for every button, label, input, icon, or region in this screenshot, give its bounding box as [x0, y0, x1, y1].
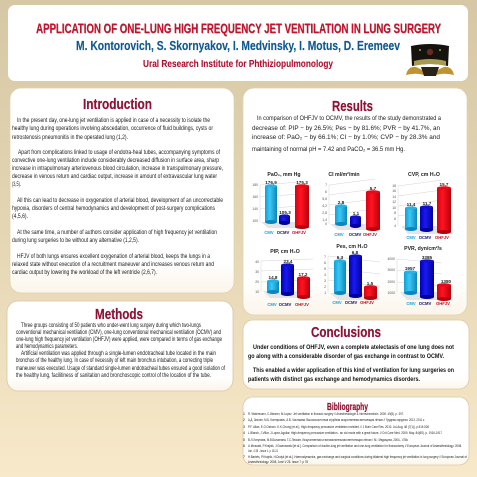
- chart: CVP: 10: [392, 206, 396, 210]
- bar: OHFJV 175,3: 175,3: [296, 180, 308, 185]
- chart: CI: 4,2: [322, 204, 327, 208]
- chart: PaO2: PaO₂, mm Hg: [267, 172, 301, 178]
- text block: methods: one-lung high frequency jet ventilation (OHFJV) were applied, were compared in terms of gas exchange: [16, 337, 222, 343]
- text block: results summary: maintaining of normal pH = 7.42 and PaCO₂ = 36.5 mm Hg.: [252, 146, 405, 153]
- reference list: R. Watermann, C.Wanner, M.Lopez. Jet ventilation in thoracic surgery // Anesthesiologie & Intensivmedizin. 2000. 49(5). p. 397.: [248, 412, 404, 416]
- chart: CI: 0: [325, 222, 327, 226]
- chart: Pes: 7: [324, 255, 326, 259]
- text block: introduction: At the same time, a number of authors consider application of high frequency jet ventilation: [17, 230, 217, 236]
- text block: introduction: In the present day, one-lung jet ventilation is applied in case of a necessity to isolate the: [17, 118, 211, 124]
- bar: CMV 2,8: 2,8: [338, 200, 345, 205]
- text block: introduction: [12, 118, 224, 276]
- text block: conclusions: patients with distinct gas exchange and hemodynamics disorders.: [248, 376, 420, 383]
- text block: conclusions: go along with a considerable disorder of gas exchange in contrast to OCMV.: [248, 353, 444, 360]
- chart: PIP: 40: [255, 260, 259, 264]
- reference list: 5: [243, 438, 245, 442]
- bar: OCMV 23,4: 23,4: [284, 259, 293, 264]
- text block: methods: maneuver was executed. Usage of standard single-lumen endotracheal tubes ensured a good isolation of: [16, 366, 225, 372]
- chart: CI: 7: [325, 183, 327, 187]
- chart: PIP: 20: [255, 280, 259, 284]
- chart: CVP: 8: [394, 211, 396, 215]
- legend: OCMV: [349, 232, 361, 237]
- chart: Pes: [324, 244, 380, 305]
- reference list: 7: [243, 455, 245, 459]
- chart: CVP: [392, 172, 453, 240]
- bar: OHFJV 15,7: 15,7: [440, 182, 449, 187]
- panel: methods: [7, 301, 233, 391]
- text block: introduction: increase in intrapulmonary arteriovenous blood circulation, increase in transpulmonary pressure,: [12, 166, 223, 172]
- legend: OHFJV: [360, 300, 374, 305]
- chart: PIP: 30: [255, 270, 259, 274]
- chart: CVP: 6: [394, 217, 396, 221]
- chart: PVR: [387, 246, 452, 306]
- reference list: 3: [243, 425, 245, 429]
- legend: [264, 230, 306, 235]
- reference list: 1: [243, 412, 245, 416]
- chart: PVR: PVR, dyn/cm²/s: [404, 246, 442, 252]
- heading: introduction: Introduction: [83, 96, 152, 113]
- chart: Pes: Pes, cm H₂O: [336, 244, 368, 250]
- legend: OHFJV: [295, 302, 309, 307]
- panel: conclusions: [243, 320, 469, 389]
- text block: introduction: cardiac output by lowering the workload of the left ventricle (2,6,7).: [12, 270, 157, 276]
- bar: CMV 11,4: 11,4: [407, 202, 416, 207]
- chart: Pes: 5: [324, 267, 326, 271]
- bar: OHFJV 17,2: 17,2: [299, 272, 308, 277]
- chart: PIP: 10: [255, 290, 259, 294]
- text block: introduction: convective one-lung ventilation include considerably decreased diffusion in surface area, sharp: [12, 158, 220, 164]
- text block: methods: conventional mechanical ventilation (CMV), one-lung conventional mechanical ventilation (OCMV) and: [16, 330, 221, 336]
- text block: introduction: (3,5).: [12, 182, 21, 188]
- text block: results summary: In comparison of OHFJV to OCMV, the results of the study demonstrated a: [257, 115, 441, 122]
- reference list: 2: [243, 418, 245, 422]
- authors: M. Kontorovich, S. Skornyakov, I. Medvinsky, I. Motus, D. Eremeev: [76, 39, 400, 53]
- text block: introduction: decrease in venous return and cardiac output, increase in amount of extravascular lung water: [12, 174, 217, 180]
- chart: PIP: PIP, cm H₂O: [270, 249, 300, 255]
- legend: [267, 302, 309, 307]
- icon: institute emblem: [406, 44, 454, 76]
- bar: CMV 1957: 1957: [405, 266, 416, 271]
- legend: OCMV: [277, 230, 289, 235]
- chart: CI: 6: [325, 190, 327, 194]
- text block: introduction: healthy lung during operations involving abscedation, occurrence of fluid buildings, cysts or: [12, 126, 213, 132]
- reference list: [243, 412, 467, 464]
- chart: CI: 5,6: [322, 197, 327, 201]
- chart: Pes: 3: [324, 279, 326, 283]
- bar: OHFJV 1380: 1380: [441, 279, 452, 284]
- reference list: 6: [243, 444, 245, 448]
- panel: bibliography: [243, 397, 469, 465]
- text block: results summary: [252, 115, 441, 153]
- heading: results: Results: [332, 99, 373, 115]
- bar: OHFJV 1,5: 1,5: [367, 281, 374, 286]
- legend: OHFJV: [436, 301, 450, 306]
- reference list: Jan. 4 35 - Issue 1. p 15-21: [248, 449, 278, 453]
- chart: PIP: [255, 249, 313, 307]
- legend: OCMV: [345, 300, 357, 305]
- text block: introduction: Apart from complications linked to usage of endotra-heal tubes, accompanying symptoms of: [18, 150, 220, 156]
- text block: methods: and hemodynamics parameters.: [16, 344, 78, 350]
- chart: PaO2: 180: [252, 183, 258, 187]
- bar: OCMV 6,8: 6,8: [352, 250, 359, 255]
- text block: methods: [16, 323, 225, 379]
- text block: introduction: relaxed state without execution of a recruitment maneuver and increases venous return and: [12, 262, 214, 268]
- chart: CVP: 12: [392, 200, 396, 204]
- text block: methods: Artificial ventilation was applied through a single-lumen endotracheal tube located in the main: [21, 351, 216, 357]
- legend: [406, 235, 449, 240]
- chart: PaO2: 100: [252, 219, 258, 223]
- reference list: P.F. Allan, E.G.Osborn, K.K.Chung [et al.]. High-frequency percussive ventilation revisited. // J Burn Care Res. 2010. Jul-Aug; 48 (7(1)). p.519-526: [248, 425, 429, 429]
- legend: OCMV: [419, 235, 431, 240]
- chart: Pes: 2: [324, 285, 326, 289]
- text block: introduction: retrostenosis pneumonitis in the operated lung (1,2).: [12, 135, 128, 141]
- chart: PVR: 1000: [387, 291, 395, 295]
- chart: CVP: 4: [394, 224, 396, 228]
- bar: OCMV 105,3: 105,3: [279, 210, 291, 215]
- bar: CMV 6,3: 6,3: [337, 255, 344, 260]
- bar: CMV 14,8: 14,8: [269, 275, 278, 280]
- chart: CI: 2,8: [322, 211, 327, 215]
- chart: CI: 1,4: [322, 218, 327, 222]
- bar: OCMV 3385: 3385: [422, 255, 433, 260]
- text block: results summary: increase of: PaO₂ − by 66.1%; CI − by 1.0%; CVP − by 28.3% and: [252, 134, 440, 141]
- chart: PVR: 2000: [387, 280, 395, 284]
- legend: OCMV: [279, 302, 291, 307]
- legend: CMV: [267, 302, 277, 307]
- bar: OHFJV 5,7: 5,7: [370, 186, 377, 191]
- legend: [406, 301, 450, 306]
- chart: CI: CI ml/m²/min: [328, 172, 360, 178]
- chart: PVR: 3000: [387, 268, 395, 272]
- legend: CMV: [334, 232, 344, 237]
- reference list: Anaesthesiology. 2008, June V 25. Issue 7. p 78: [248, 460, 308, 464]
- reference list: 4: [243, 431, 245, 435]
- chart: PVR: 4000: [387, 257, 395, 261]
- heading: bibliography: Bibliography: [327, 402, 368, 413]
- heading: methods: Methods: [95, 306, 143, 323]
- text block: methods: Three groups consisting of 50 patients who under-went lung surgery during which two-lungs: [21, 323, 201, 329]
- chart: CVP: CVP, cm H₂O: [408, 172, 440, 178]
- text block: methods: the healthy lung, facilitiness of sanitation and bronchoscopic control of the location of the tube.: [16, 373, 211, 379]
- chart: Pes: 6: [324, 261, 326, 265]
- legend: OHFJV: [292, 230, 306, 235]
- bar: CMV 176,9: 176,9: [265, 180, 277, 185]
- bar: OCMV 1,1: 1,1: [353, 211, 360, 216]
- panel: results: [243, 88, 467, 315]
- legend: CMV: [332, 300, 342, 305]
- chart: PaO2: 140: [252, 207, 258, 211]
- legend: CMV: [406, 235, 416, 240]
- legend: CMV: [406, 301, 416, 306]
- legend: CMV: [264, 230, 274, 235]
- institute: Ural Research Institute for Phthiziopulmonology: [143, 58, 333, 70]
- chart: Pes: 1: [324, 291, 326, 295]
- panel: header: [8, 5, 468, 81]
- text block: introduction: during lung surgeries to be without any alternative (1,2,5).: [12, 238, 139, 244]
- bar: OCMV 11,7: 11,7: [423, 201, 432, 206]
- chart: CVP: 16: [392, 189, 396, 193]
- chart: PaO2: 160: [252, 195, 258, 199]
- text block: methods: bronchus of the healthy lung. In case of necessity of left main bronchus intubation, a correcting triple: [16, 358, 213, 364]
- text block: introduction: All this can lead to decrease in oxygenation of arterial blood, development of an uncorrectable: [17, 198, 224, 204]
- text block: introduction: hypoxia, disorders of central hemodynamics and development of post-surgery complications: [12, 206, 215, 212]
- chart: CVP: 14: [392, 195, 396, 199]
- legend: OHFJV: [363, 232, 377, 237]
- panel: introduction: [10, 88, 234, 293]
- legend: [334, 232, 377, 237]
- text block: conclusions: [248, 344, 455, 383]
- reference list: В.Л.Хатунова, М.В.Бычинина, Г.С.Лескин. Искусственная и вспомогательная вентиляция лёгких / М.: Медицина, 2004.- 478с: [248, 438, 408, 442]
- text block: results summary: decrease of: PIP − by 26.5%; Pes − by 81.6%; PVR − by 41.7%, an: [252, 125, 440, 132]
- chart: PaO2: [252, 172, 311, 235]
- chart: Pes: 4: [324, 273, 326, 277]
- heading: conclusions: Conclusions: [311, 325, 381, 341]
- text block: introduction: (4,5,6).: [12, 214, 28, 220]
- chart: CI: [322, 172, 382, 237]
- legend: OCMV: [419, 301, 431, 306]
- legend: [332, 300, 374, 305]
- legend: OHFJV: [435, 235, 449, 240]
- text block: introduction: HFJV of both lungs ensures excellent oxygenation of arterial blood, keeps the lungs in a: [17, 254, 211, 260]
- chart: CVP: 18: [392, 184, 396, 188]
